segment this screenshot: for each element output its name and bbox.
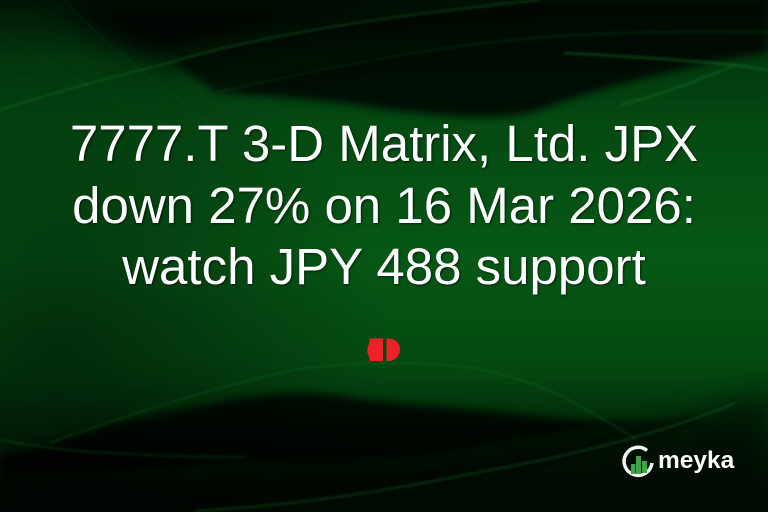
title: down 27% on 16 Mar 2026:: [72, 176, 696, 234]
bottom dark blob: [0, 394, 711, 477]
title: [70, 115, 698, 296]
top dark wedge: [60, 0, 540, 62]
title: watch JPY 488 support: [122, 238, 646, 295]
logo wordmark: meyka: [658, 447, 734, 474]
icon: meyka logo mark: [622, 446, 654, 478]
title: 7777.T 3-D Matrix, Ltd. JPX: [70, 115, 698, 172]
icon: red loading glyph: [367, 338, 400, 361]
logo: meyka: [622, 446, 734, 478]
